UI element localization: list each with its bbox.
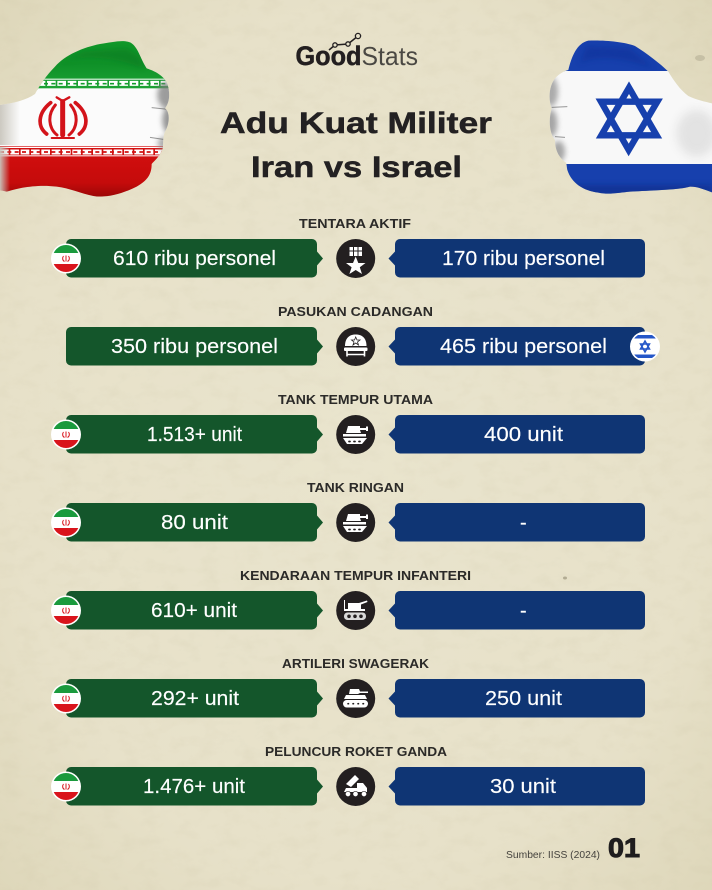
logo: GoodStats: Good: [296, 41, 362, 71]
title: Iran vs Israel: [251, 151, 462, 184]
icon: self-propelled artillery: [336, 679, 375, 718]
row: Peluncur Roket Ganda: [51, 745, 645, 806]
bar: Israel infantry fighting vehicles: [388, 591, 645, 630]
bar: Iran infantry fighting vehicles: [66, 591, 323, 630]
label: Tank Ringan: TANK RINGAN: [307, 481, 404, 495]
value: Iran self-propelled artillery: 292+ unit: [151, 688, 239, 710]
icon: light tank: [336, 503, 375, 542]
row: Tank Tempur Utama: [51, 393, 645, 454]
bar: Israel active soldiers: [388, 239, 645, 278]
value: Iran multiple rocket launchers: 1.476+ unit: [143, 776, 245, 798]
bar: Iran self-propelled artillery: [66, 679, 323, 718]
icon: Iran flag fist: [0, 41, 170, 197]
icon: medal: [336, 239, 375, 278]
label: Kendaraan Tempur Infanteri: KENDARAAN TEMPUR INFANTERI: [240, 569, 471, 583]
icon: rocket launcher: [336, 767, 375, 806]
bar: Iran light tanks: [66, 503, 323, 542]
bar: Iran active soldiers: [66, 239, 323, 278]
row: Tank Ringan: [51, 481, 645, 542]
flag: Iran: [51, 772, 81, 802]
row: Artileri Swagerak: [51, 657, 645, 718]
bar: Israel self-propelled artillery: [388, 679, 645, 718]
row: Tentara Aktif: [51, 217, 645, 278]
value: Iran active soldiers: 610 ribu personel: [113, 248, 276, 270]
flag: Iran: [51, 684, 81, 714]
logo: GoodStats: Stats: [362, 41, 418, 71]
value: Israel multiple rocket launchers: 30 unit: [490, 776, 556, 798]
label: Tentara Aktif: TENTARA AKTIF: [299, 217, 411, 231]
value: Iran reserves: 350 ribu personel: [111, 336, 278, 358]
row: Pasukan Cadangan: [66, 305, 660, 366]
value: Israel self-propelled artillery: 250 unit: [485, 688, 562, 710]
bar: Iran main battle tanks: [66, 415, 323, 454]
value: Israel light tanks: -: [520, 512, 527, 534]
label: Tank Tempur Utama: TANK TEMPUR UTAMA: [278, 393, 433, 407]
icon: helmet: [336, 327, 375, 366]
flag: Iran: [51, 508, 81, 538]
bar: Israel multiple rocket launchers: [388, 767, 645, 806]
source: Sumber: IISS (2024): [506, 849, 600, 861]
value: Israel main battle tanks: 400 unit: [484, 424, 563, 446]
bar: Israel light tanks: [388, 503, 645, 542]
bar: Iran reserves: [66, 327, 323, 366]
label: Peluncur Roket Ganda: PELUNCUR ROKET GANDA: [265, 745, 447, 759]
value: Israel infantry fighting vehicles: -: [520, 600, 527, 622]
value: Iran main battle tanks: 1.513+ unit: [147, 424, 242, 446]
title: [220, 107, 493, 184]
page number: 01: [608, 833, 640, 863]
flag: Israel: [630, 332, 660, 362]
row: Kendaraan Tempur Infanteri: [51, 569, 645, 630]
label: Pasukan Cadangan: PASUKAN CADANGAN: [278, 305, 433, 319]
value: Iran light tanks: 80 unit: [161, 512, 228, 534]
icon: main battle tank: [336, 415, 375, 454]
flag: Iran: [51, 244, 81, 274]
label: Artileri Swagerak: ARTILERI SWAGERAK: [282, 657, 429, 671]
logo: GoodStats: [296, 33, 418, 71]
bar: Israel main battle tanks: [388, 415, 645, 454]
bar: Iran multiple rocket launchers: [66, 767, 323, 806]
title: Adu Kuat Militer: [220, 107, 493, 140]
flag: Iran: [51, 420, 81, 450]
icon: Israel flag fist: [543, 33, 712, 197]
flag: Iran: [51, 596, 81, 626]
value: Israel active soldiers: 170 ribu personel: [442, 248, 605, 270]
value: Israel reserves: 465 ribu personel: [440, 336, 607, 358]
value: Iran infantry fighting vehicles: 610+ unit: [151, 600, 237, 622]
icon: infantry fighting vehicle: [336, 591, 375, 630]
bar: Israel reserves: [388, 327, 645, 366]
